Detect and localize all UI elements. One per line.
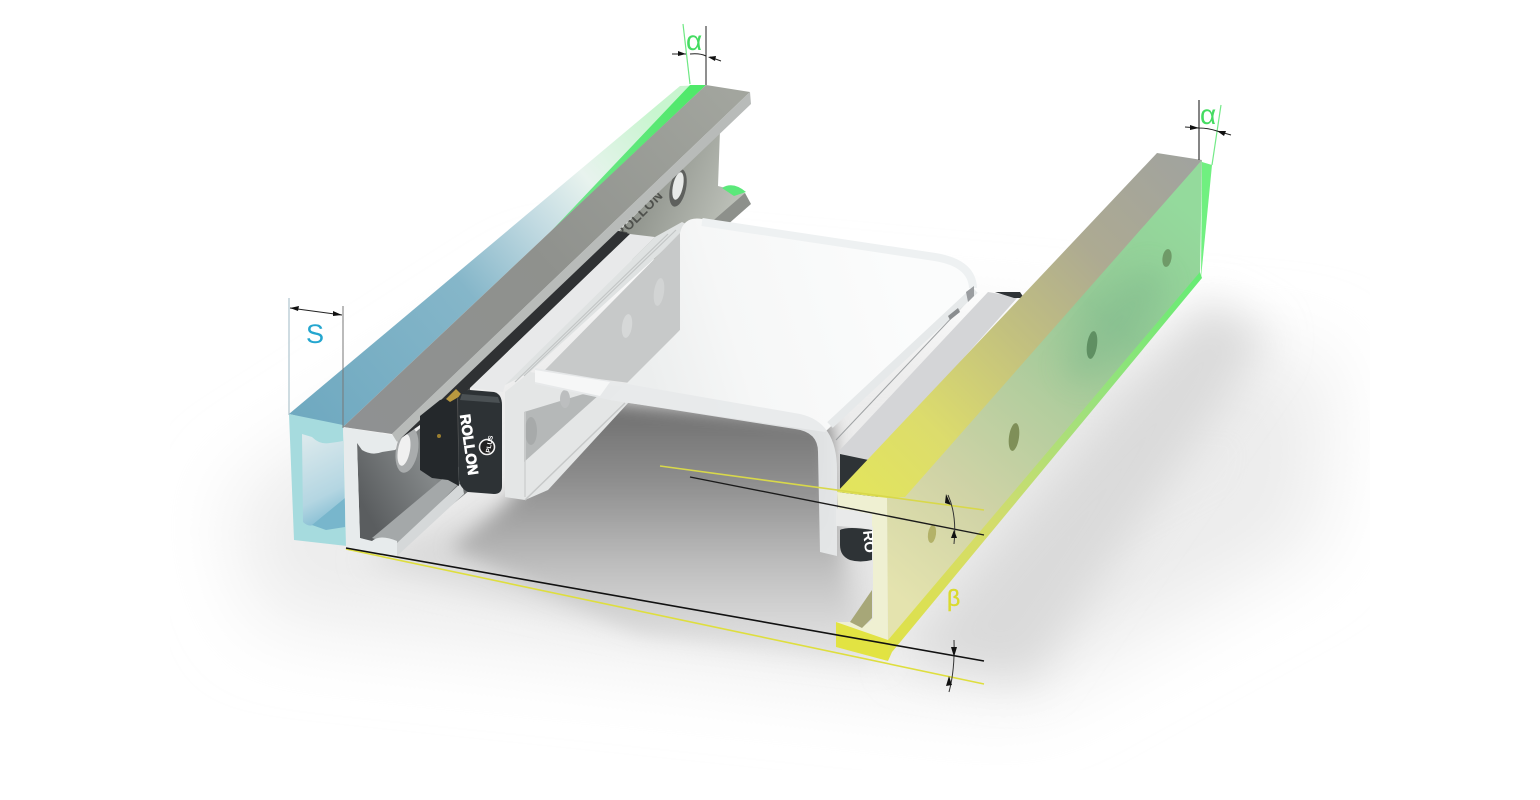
left rail top face (343, 85, 750, 434)
floor shadow (230, 290, 1330, 700)
left rail dark underside (397, 230, 630, 441)
cap brand text fragment: RO (859, 530, 878, 554)
tolerance lines beta (346, 466, 984, 692)
lower yellow-green edge (888, 272, 1202, 661)
translucent block side with holes (543, 233, 680, 383)
ghost inner cavity (302, 434, 345, 527)
diagram: linear rail system with misalignment tolerances (239, 24, 1331, 710)
end cap with ROLLON logo (456, 390, 502, 494)
plus badge: PLUS (485, 434, 495, 453)
side holes (1161, 248, 1173, 268)
label: beta: β (947, 585, 960, 611)
right rail outer side face (887, 160, 1212, 661)
ghost front profile (289, 414, 347, 546)
label: alpha: α (1200, 99, 1216, 130)
dimension alpha, far end of right rail (1185, 99, 1231, 165)
ghost top face (289, 85, 706, 427)
cap brand text: ROLLON (456, 413, 480, 476)
left rail front profile (343, 427, 397, 556)
left ghost rail: shifted position S (289, 85, 706, 546)
right rail top face (837, 153, 1202, 498)
embossed rail brand: ROLLON (613, 188, 666, 241)
carriage slider top, ridges and side (470, 222, 720, 392)
slider block behind end cap (420, 389, 462, 486)
glass carriage front band and side wall (535, 368, 837, 556)
label: alpha: α (686, 25, 702, 56)
right rail front profile (836, 492, 888, 661)
ghost green edge (480, 85, 706, 306)
carriage front block (505, 372, 640, 500)
dimension alpha, far end of left rail (672, 24, 721, 85)
mounting hole (392, 425, 422, 475)
left rail cavity (357, 385, 470, 556)
glass carriage top plate (610, 219, 976, 432)
right carriage slider (836, 292, 1024, 562)
left rail far end: web, hole and lower lip (600, 130, 751, 262)
green end strip (1201, 162, 1212, 278)
dimension S (289, 298, 343, 428)
label: S: S (306, 319, 324, 349)
